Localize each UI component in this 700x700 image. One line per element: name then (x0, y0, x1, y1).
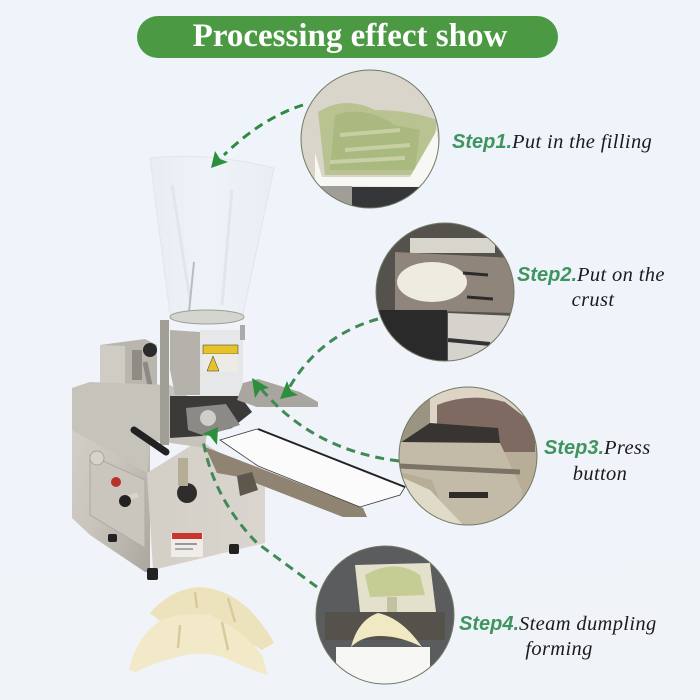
photo: step 3 press button (399, 387, 540, 527)
step 2 label (517, 264, 665, 311)
column (160, 320, 169, 445)
rear motor box (100, 339, 157, 395)
step 1 label: Step1. (452, 131, 512, 153)
title banner (137, 16, 558, 58)
step 3 label: button (573, 463, 627, 485)
step 3 label: Step3. (544, 437, 604, 459)
filling head block (170, 325, 245, 396)
photo ring: step 1 (301, 70, 439, 208)
title banner: Processing effect show (193, 18, 507, 54)
machine illustration (72, 156, 405, 580)
forming mechanism (170, 396, 252, 438)
feet (108, 534, 239, 580)
step 1 label: Put in the filling (511, 131, 652, 153)
arrow: step 2 to tray (280, 319, 378, 399)
top deck (72, 382, 210, 473)
step 4 label (459, 613, 657, 660)
step 4 label: Step4. (459, 613, 519, 635)
photo ring: step 4 (316, 546, 454, 684)
step 2 label: crust (572, 289, 615, 311)
black handle (134, 430, 166, 452)
warning sticker (171, 533, 203, 557)
hopper (150, 156, 274, 324)
machine base left face (72, 382, 150, 572)
conveyor rail (205, 447, 367, 517)
conveyor bracket and knob (177, 458, 258, 503)
dumpling (129, 587, 274, 675)
arrow: step 3 to tray (252, 378, 399, 461)
photo: step 4 dumpling forming (316, 546, 454, 666)
step 3 label: Press (603, 437, 651, 459)
photo: step 1 filling (300, 70, 442, 216)
warning label (203, 345, 238, 372)
arrow: step 4 to mechanism (202, 427, 317, 587)
machine base right face (147, 440, 265, 570)
step 3 label (544, 437, 651, 485)
arrow: step 1 to hopper (211, 105, 303, 168)
conveyor belt (220, 429, 405, 507)
photo ring: step 3 (399, 387, 537, 525)
photo ring: step 2 (376, 223, 514, 361)
step 4 label: forming (525, 638, 593, 660)
step 4 label: Steam dumpling (519, 613, 657, 635)
control panel (90, 451, 145, 548)
step 2 label: Put on the (576, 264, 665, 286)
step 2 label: Step2. (517, 264, 577, 286)
top tray (237, 379, 318, 407)
photo: step 2 crust (375, 222, 515, 365)
